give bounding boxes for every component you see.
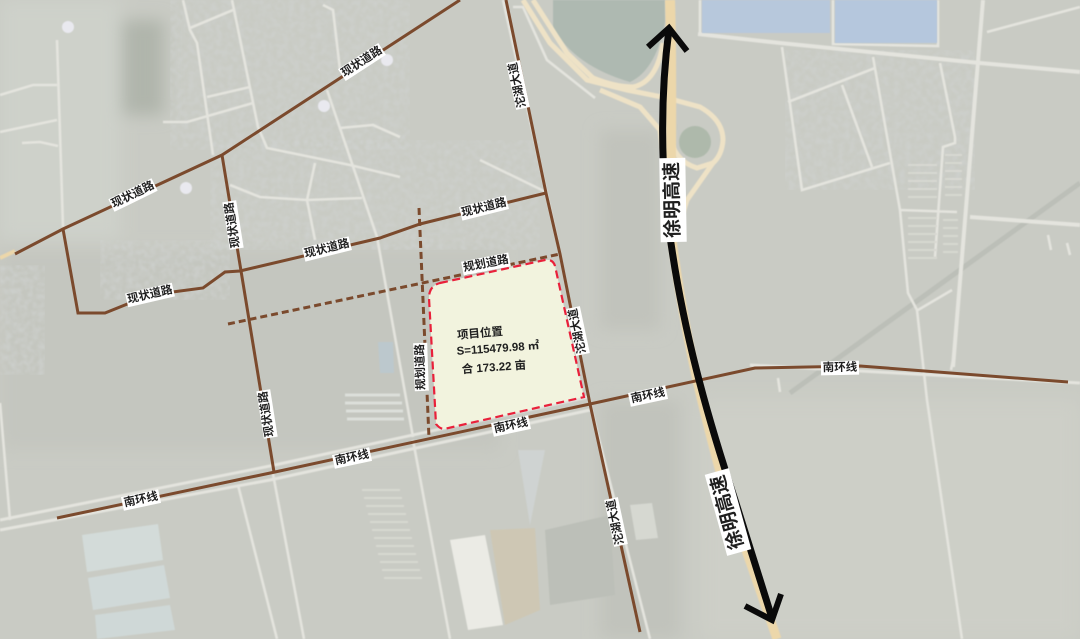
label: south ring 5: 南环线 bbox=[823, 360, 858, 374]
label: Xuming expressway south: 徐明高速 bbox=[706, 473, 748, 552]
expressway road surface bbox=[0, 0, 777, 639]
label: existing road 7: 现状道路 bbox=[255, 390, 277, 438]
round pond in interchange bbox=[679, 126, 711, 158]
minor roads right bbox=[698, 34, 1080, 72]
label: existing road 6: 现状道路 bbox=[126, 282, 174, 306]
label: Xuming expressway north: 徐明高速 bbox=[660, 162, 684, 238]
expressway arrow bbox=[648, 28, 781, 620]
road: south ring line bbox=[57, 366, 1068, 518]
label: existing road 5: 现状道路 bbox=[303, 236, 351, 260]
label: south ring 1: 南环线 bbox=[122, 488, 160, 509]
road: planned roads dashed bbox=[228, 208, 560, 438]
road: existing roads network bbox=[15, 0, 640, 632]
project site text: S=115479.98 ㎡ bbox=[456, 339, 540, 358]
label: Tuohu avenue 1: 沱湖大道 bbox=[505, 61, 529, 109]
project site parcel bbox=[429, 260, 584, 429]
map point markers bbox=[62, 21, 393, 194]
label: Tuohu avenue 3: 沱湖大道 bbox=[603, 498, 627, 546]
minor roads left bbox=[0, 40, 63, 227]
label: south ring 3: 南环线 bbox=[492, 414, 530, 435]
village texture bbox=[0, 0, 975, 375]
project site text: 合 173.22 亩 bbox=[461, 358, 527, 376]
label: south ring 4: 南环线 bbox=[629, 384, 667, 405]
label: Tuohu avenue 2: 沱湖大道 bbox=[565, 307, 589, 355]
label: south ring 2: 南环线 bbox=[333, 446, 371, 467]
water pond bbox=[553, 0, 665, 82]
project site text: 项目位置 bbox=[456, 324, 503, 342]
project site text bbox=[456, 324, 540, 376]
label: existing road 4: 现状道路 bbox=[460, 195, 508, 219]
road labels bbox=[108, 42, 859, 547]
expressway interchange bbox=[523, 0, 723, 213]
farm stripes bbox=[345, 155, 962, 578]
label: existing road 1: 现状道路 bbox=[338, 42, 385, 80]
label: planned road vertical: 规划道路 bbox=[412, 343, 428, 390]
blue factory roofs bbox=[702, 0, 937, 43]
label: existing road 3: 现状道路 bbox=[221, 201, 243, 249]
railway embankment bbox=[790, 183, 1080, 393]
label: existing road 2: 现状道路 bbox=[109, 178, 157, 210]
label: planned road horizontal: 规划道路 bbox=[462, 252, 510, 274]
factory buildings bbox=[82, 342, 658, 639]
